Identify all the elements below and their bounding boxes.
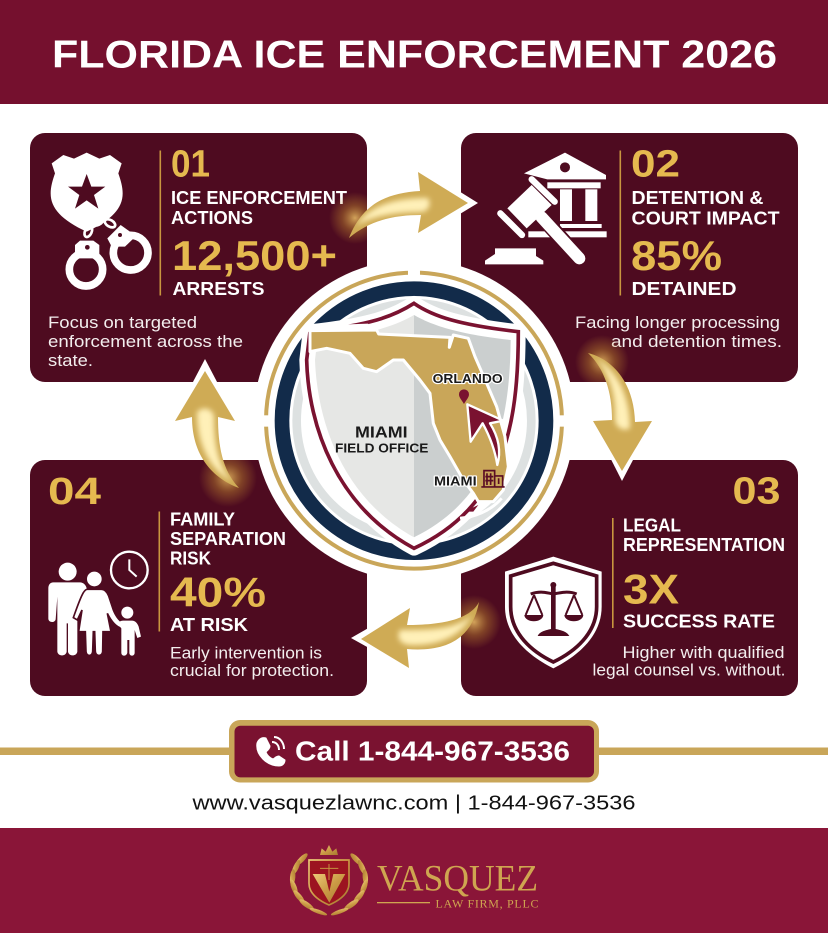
Florida map: [310, 330, 508, 502]
stat: 3X: [623, 566, 679, 612]
map labels: MIAMI: [355, 424, 408, 441]
heading: FAMILY: [170, 509, 236, 530]
stat: [170, 569, 266, 635]
stat: SUCCESS RATE: [623, 611, 775, 632]
icon: courthouse and gavel: [485, 153, 607, 264]
body text: [170, 644, 334, 680]
call to action: [0, 720, 828, 782]
logo wordmark: LAW FIRM, PLLC: [436, 896, 538, 910]
stat: 12,500+: [172, 232, 337, 279]
heading: COURT IMPACT: [632, 207, 780, 228]
heading: [623, 515, 785, 555]
body text: Focus on targeted: [48, 314, 197, 332]
panel: 02 detention and court impact: [461, 133, 798, 382]
title: FLORIDA ICE ENFORCEMENT 2026: [52, 34, 777, 76]
heading: DETENTION &: [632, 187, 764, 208]
body text: and detention times.: [611, 333, 782, 351]
body text: crucial for protection.: [170, 662, 334, 680]
logo wordmark: VASQUEZ: [377, 859, 538, 900]
body text: [592, 644, 786, 680]
logo emblem: [289, 845, 369, 917]
body text: Higher with qualified: [622, 644, 784, 662]
arrow: 01 to 02: [331, 172, 478, 242]
map labels: MIAMI: [434, 475, 477, 489]
body text: [48, 314, 243, 370]
arrow: 03 to 04: [351, 595, 501, 672]
icon: shield with scales: [505, 557, 602, 668]
arrow: 04 to 01: [172, 359, 257, 507]
heading: ACTIONS: [171, 207, 253, 228]
stat: ARRESTS: [172, 278, 264, 299]
body text: [575, 314, 782, 351]
panel: 01 ICE enforcement actions: [30, 133, 367, 382]
migration arrow: [467, 404, 503, 465]
stat: [172, 232, 337, 299]
map labels: [335, 372, 503, 489]
stat: 40%: [170, 569, 266, 616]
arrow: 02 to 03: [575, 335, 655, 481]
icon: building: [481, 471, 505, 487]
icon: police badge and handcuffs: [51, 153, 148, 286]
stat: [623, 566, 775, 632]
body text: state.: [48, 352, 93, 370]
panel: 03 legal representation: [461, 460, 798, 696]
icon: phone: [257, 737, 285, 766]
heading: [170, 509, 286, 568]
body text: enforcement across the: [48, 333, 243, 351]
body text: legal counsel vs. without.: [592, 662, 786, 680]
shield: [304, 303, 518, 548]
map labels: FIELD OFFICE: [335, 442, 428, 456]
orlando pin: [459, 389, 469, 404]
number: 01: [171, 144, 210, 186]
stat: AT RISK: [170, 614, 249, 635]
panel: 04 family separation risk: [30, 460, 367, 696]
stat: DETAINED: [632, 278, 736, 299]
map labels: ORLANDO: [433, 372, 503, 386]
phone number: Call 1-844-967-3536: [295, 736, 570, 767]
body text: Early intervention is: [170, 644, 322, 662]
number: 04: [48, 471, 101, 513]
header band: [0, 0, 828, 104]
body text: Facing longer processing: [575, 314, 780, 332]
central emblem: Florida map in shield: [253, 259, 575, 581]
number: 03: [732, 470, 780, 512]
heading: LEGAL: [623, 515, 681, 536]
heading: SEPARATION: [170, 528, 286, 549]
stat: 85%: [631, 232, 722, 279]
stat: [631, 232, 736, 299]
number: 02: [631, 144, 680, 186]
icon: family and clock: [48, 552, 148, 656]
website and phone line: www.vasquezlawnc.com | 1-844-967-3536: [191, 792, 636, 814]
heading: [632, 187, 780, 228]
footer band: [0, 828, 828, 933]
heading: REPRESENTATION: [623, 534, 785, 555]
heading: [171, 187, 348, 228]
heading: RISK: [170, 547, 212, 568]
heading: ICE ENFORCEMENT: [171, 187, 348, 208]
